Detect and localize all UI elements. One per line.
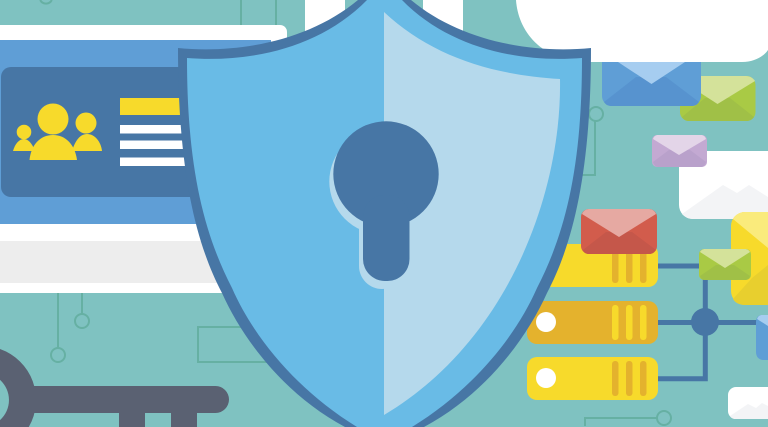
network hub [691,308,719,336]
profile card [1,67,231,197]
envelope: blue large [602,50,701,106]
block: yellow [731,212,768,305]
shield [178,0,591,427]
photo card [679,151,768,219]
photo card small [728,387,768,419]
connector lines [658,266,757,379]
icon: people [13,104,102,160]
server 2 [527,301,658,344]
shield light half [384,12,560,415]
cloud [516,0,768,62]
white blocks behind shield [305,0,463,40]
server 3 [527,357,658,400]
envelope: green [680,76,756,121]
envelope: green small [699,249,751,280]
envelope: purple [652,135,707,167]
text lines [120,98,188,166]
envelope: blue small [756,315,768,360]
keyhole [329,121,439,289]
envelope: red [581,209,657,254]
key [0,349,229,427]
server 1 [527,244,658,287]
browser window [0,25,287,293]
